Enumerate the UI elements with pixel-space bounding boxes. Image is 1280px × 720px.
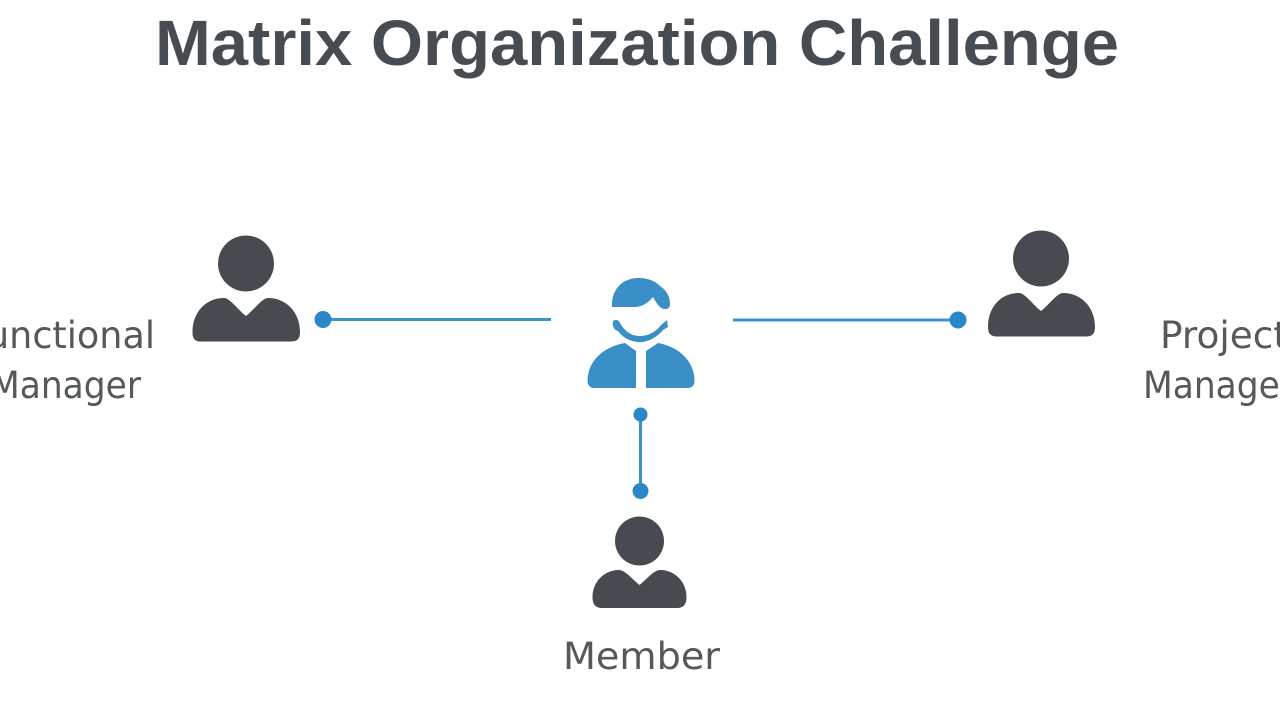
connector: central member to member [632, 408, 648, 499]
label: member: Member [563, 635, 721, 678]
icon: functional manager [192, 236, 300, 342]
title: Matrix Organization Challenge [155, 7, 1119, 79]
icon: project manager [988, 230, 1095, 336]
icon: member [592, 516, 686, 608]
icon: central member with headset [588, 278, 694, 388]
connector: central member to project manager [733, 312, 966, 328]
connector: functional manager to member [314, 311, 551, 328]
